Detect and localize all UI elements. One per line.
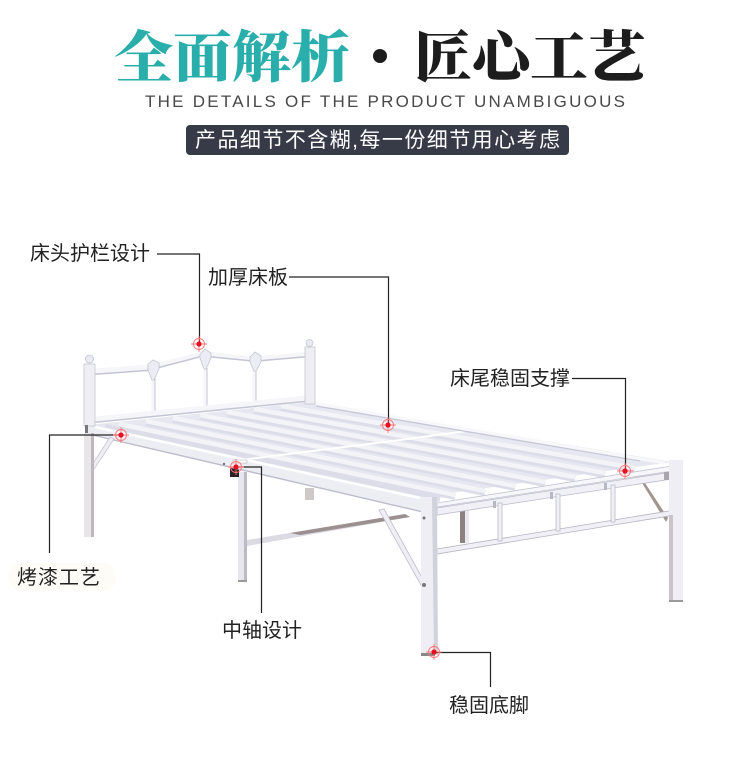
deck (88, 402, 672, 497)
head board (84, 340, 315, 426)
side frame (88, 424, 423, 512)
title black part: 匠心工艺 (414, 28, 646, 90)
label: headboard guard rail: 床头护栏设计 (30, 242, 150, 265)
label: foot support (450, 367, 626, 470)
title teal part: 全面解析 (114, 28, 350, 90)
label: baked paint: 烤漆工艺 (17, 566, 100, 589)
label: stable foot: 稳固底脚 (449, 694, 529, 717)
label: foot support: 床尾稳固支撑 (450, 367, 570, 390)
subtitle pill: 产品细节不含糊,每一份细节用心考虑 (195, 129, 560, 152)
bed illustration (84, 340, 683, 656)
deck slats (105, 403, 665, 499)
title dot (373, 49, 387, 63)
header (114, 28, 646, 155)
corner posts (421, 460, 683, 656)
side braces (85, 437, 668, 587)
label: thick deck: 加厚床板 (208, 266, 288, 289)
label: thick deck (208, 266, 388, 424)
label: central axis: 中轴设计 (222, 619, 302, 642)
target markers (113, 336, 633, 660)
english subtitle: THE DETAILS OF THE PRODUCT UNAMBIGUOUS (145, 92, 625, 111)
label: stable foot (435, 652, 529, 717)
label: baked paint (8, 435, 120, 591)
back and middle legs (230, 467, 469, 582)
foot board (437, 466, 675, 554)
label: central axis (222, 467, 302, 642)
near head leg (84, 425, 94, 537)
label: headboard guard rail (30, 242, 200, 343)
